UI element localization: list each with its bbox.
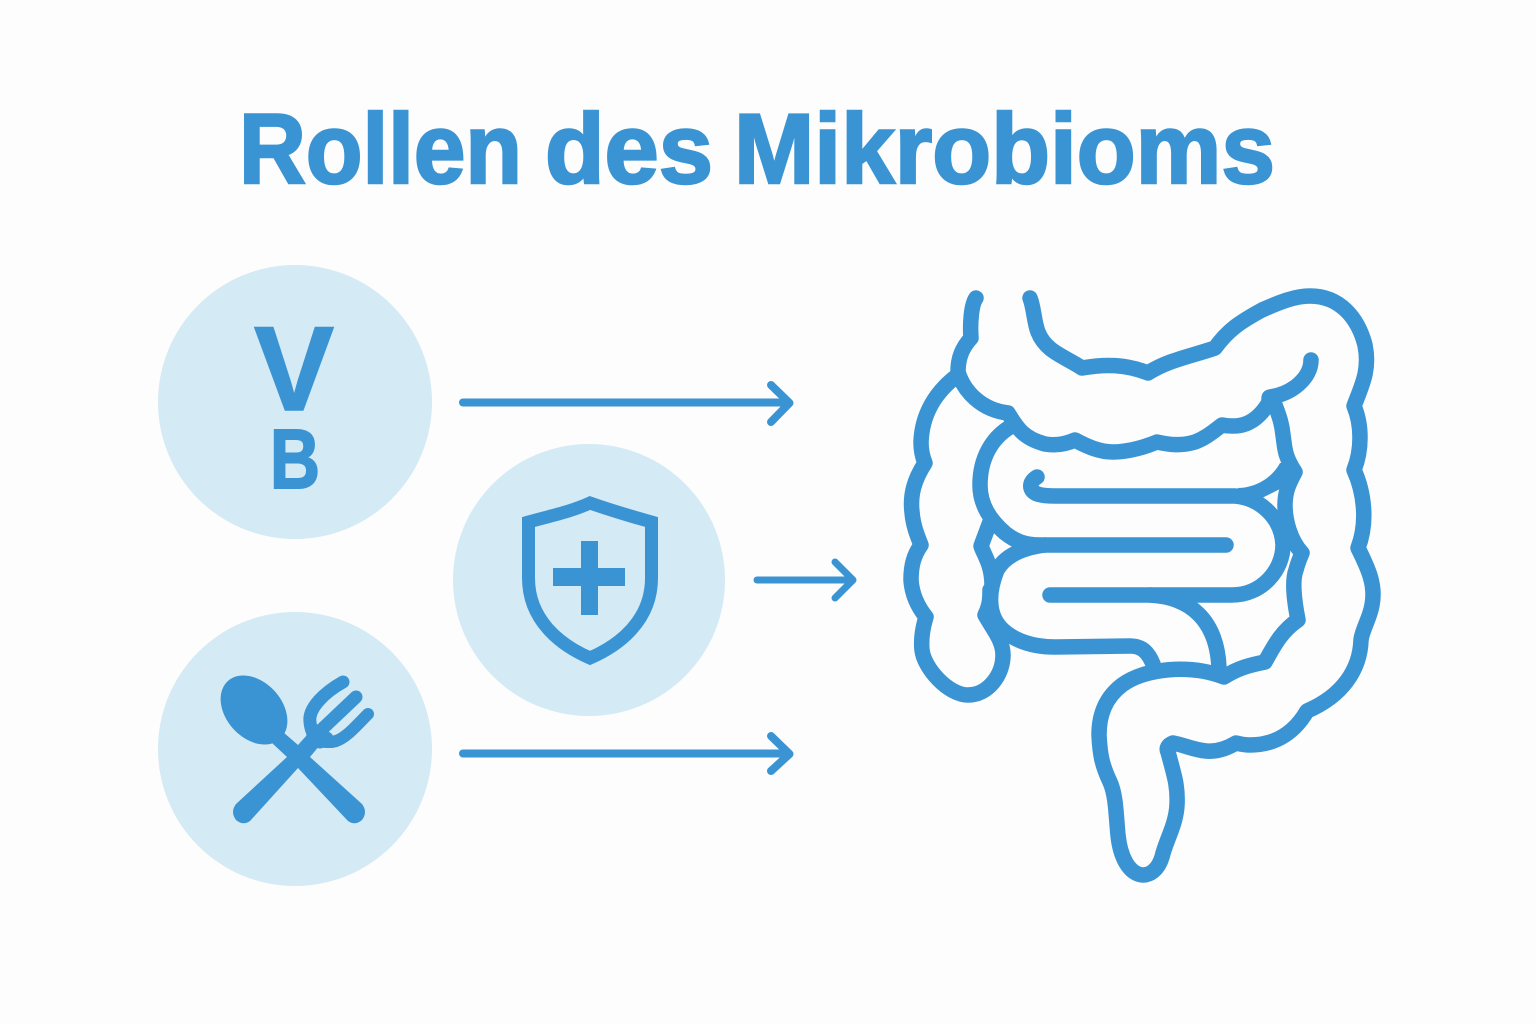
icon: vitamins V and B in circle: V — [254, 302, 334, 436]
icon: vitamins V and B in circle — [158, 265, 432, 539]
large intestine: left ascending contour and cecum — [911, 375, 1003, 695]
large intestine: transverse lower edge with stub — [958, 298, 1311, 452]
arrow: immunity to gut — [757, 562, 853, 598]
icon: vitamins V and B in circle: B — [270, 412, 320, 506]
arrow: vitamins to gut — [463, 385, 790, 422]
small intestine: left kink junction — [981, 522, 992, 585]
small intestine: terminal ileum arc — [1150, 595, 1219, 668]
arrow: digestion to gut — [463, 736, 790, 771]
intestine illustration — [911, 296, 1373, 875]
small intestine: lower loop into cecum — [990, 545, 1153, 664]
small intestine: wedge joining upper right branch — [1238, 463, 1290, 498]
title: Mikrobioms — [734, 93, 1275, 204]
icon: shield with cross in circle — [453, 444, 725, 716]
title — [239, 93, 1275, 204]
small intestine: hook and serpentine middle section — [1031, 477, 1283, 595]
title: des — [545, 93, 713, 204]
large intestine: outer right contour to rectum — [1030, 296, 1373, 875]
small intestine: upper loop from colon to middle rung — [980, 427, 1226, 545]
icon: spoon and fork in circle — [158, 612, 432, 886]
title: Rollen — [239, 93, 522, 204]
